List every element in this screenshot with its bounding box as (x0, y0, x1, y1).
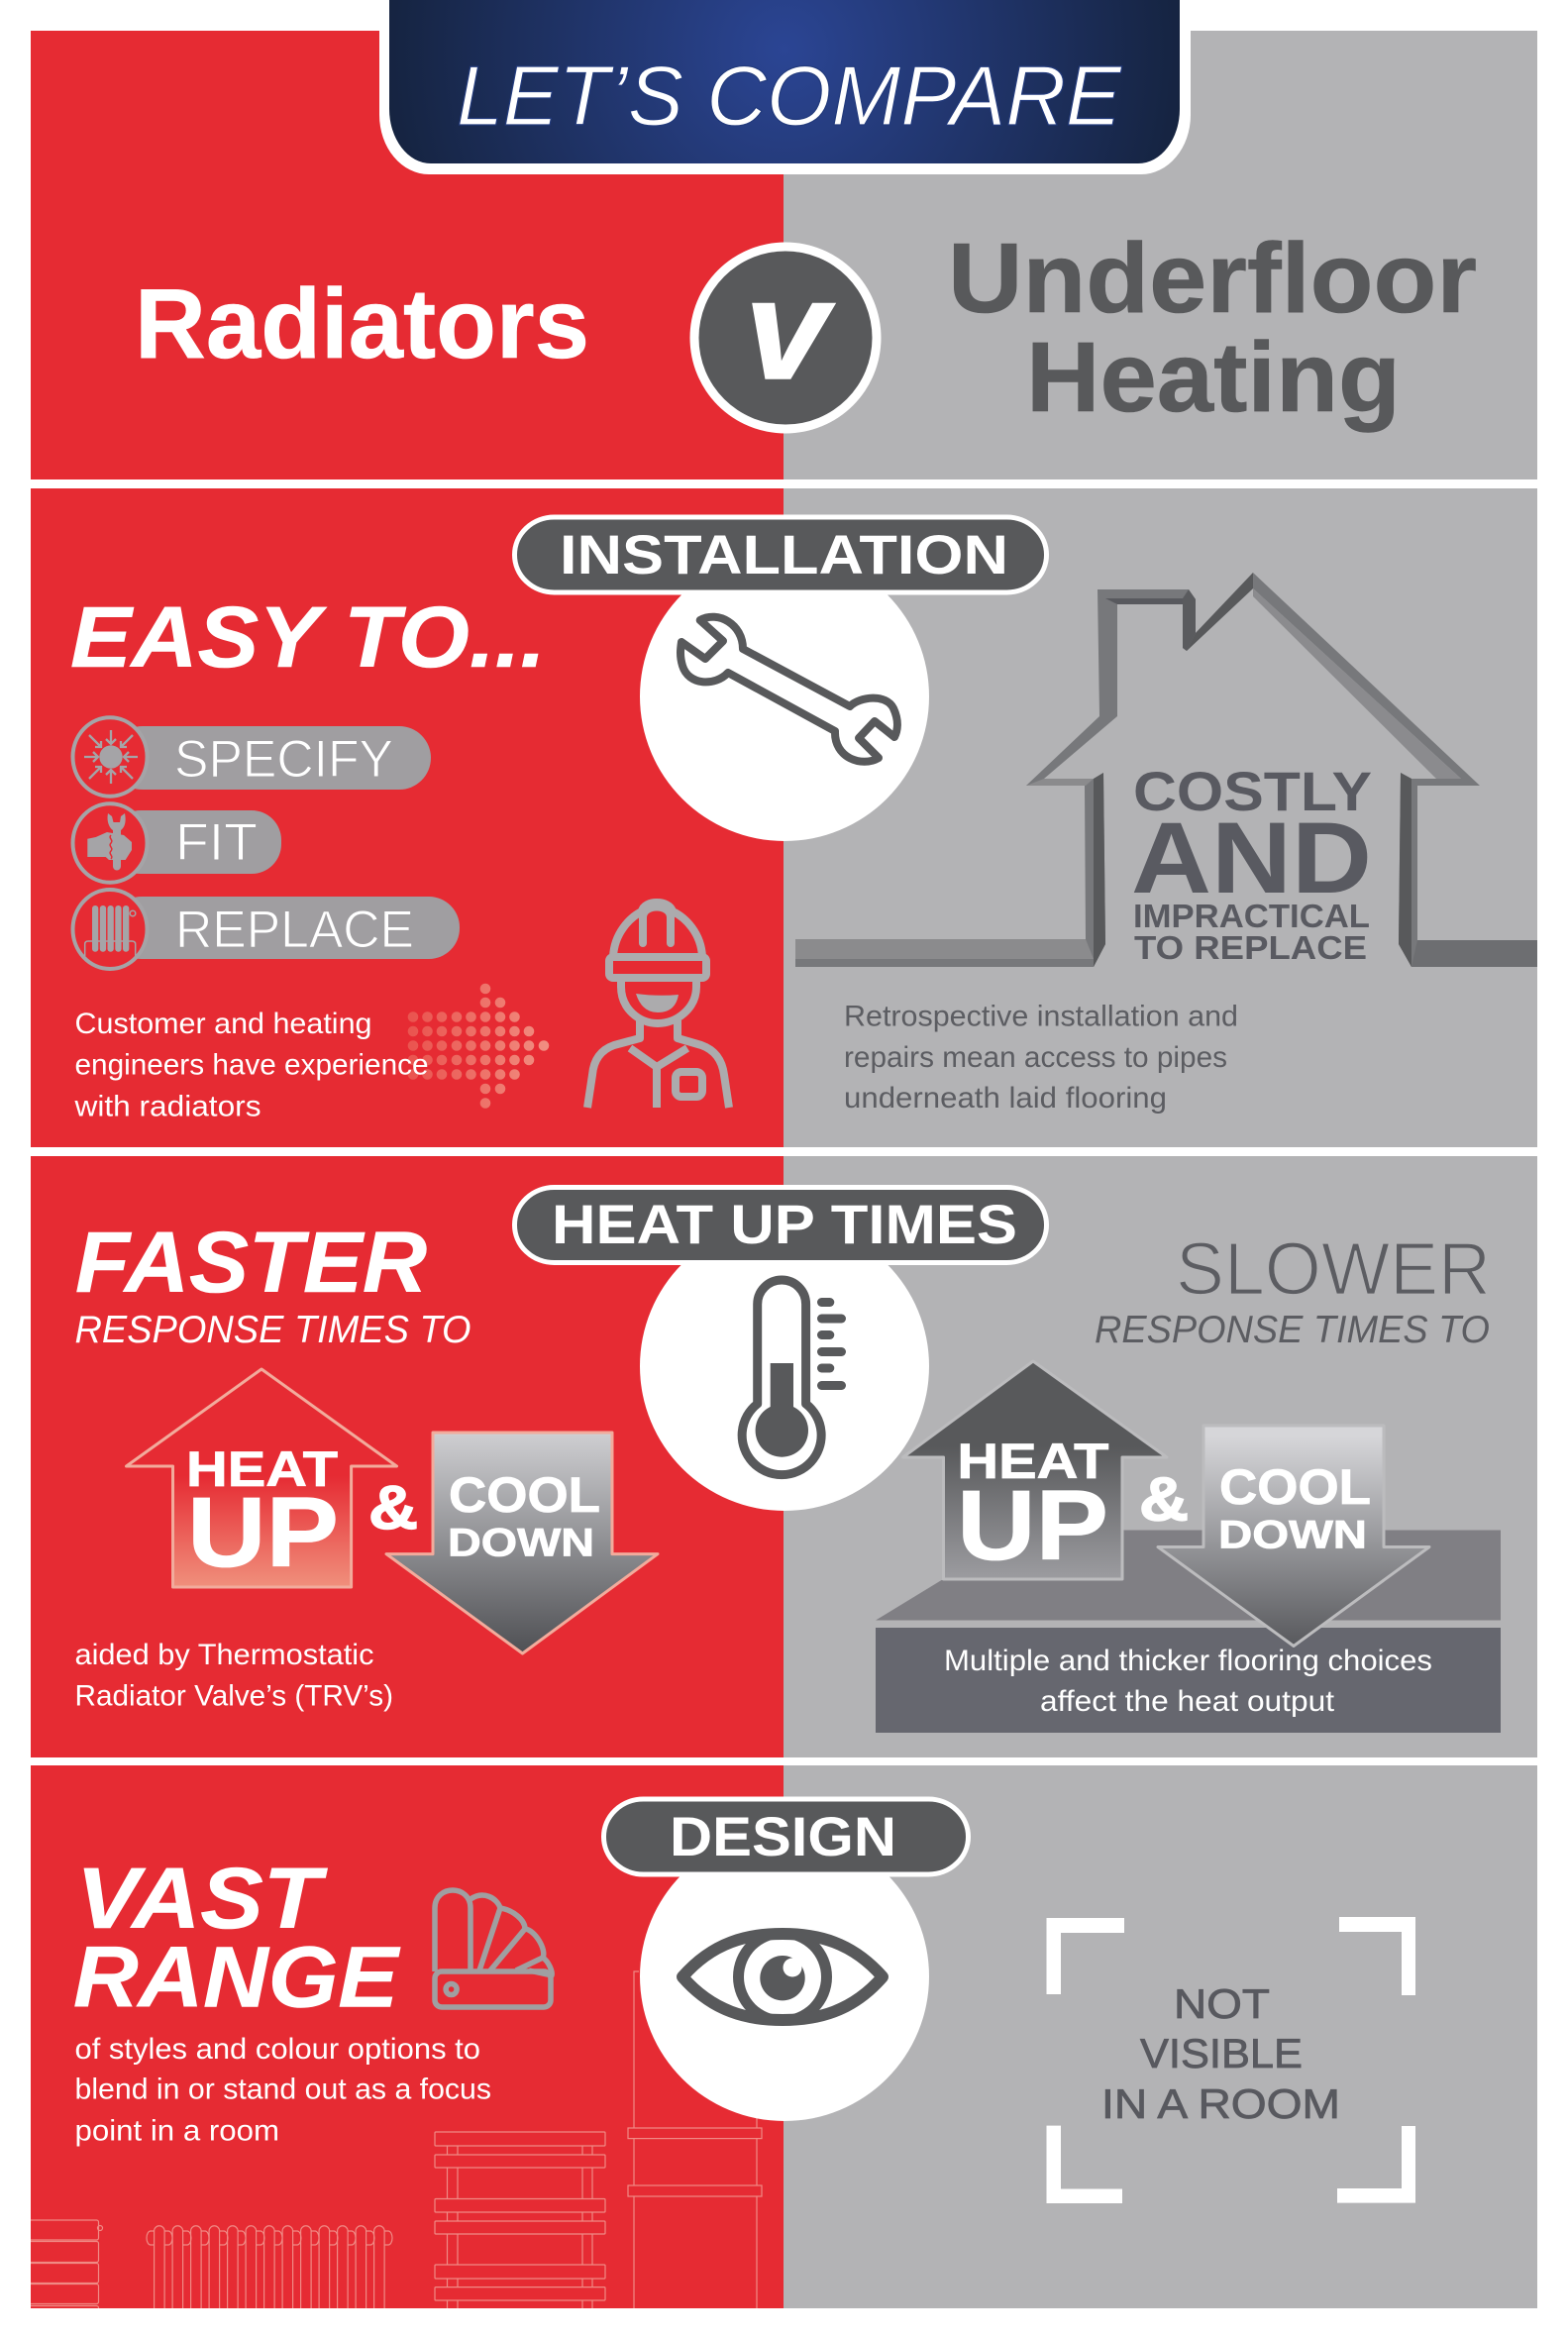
arrow: heat up on red: HEAT (186, 1441, 338, 1497)
panel: installation (31, 488, 1537, 1147)
flooring text block: affect the heat output (1040, 1685, 1335, 1718)
icon: colour swatch fan (435, 1890, 552, 2007)
ampersand: & (368, 1474, 418, 1542)
versus badge: v (745, 252, 836, 409)
text: retrospective installation (844, 1001, 1238, 1115)
arrow: cool down on grey (1158, 1426, 1429, 1647)
ampersand grey: & (1139, 1466, 1189, 1534)
heading: underfloor heating (948, 223, 1477, 433)
radiator outline: column (147, 2226, 392, 2308)
panel: header comparison (31, 0, 1537, 479)
icon: heating engineer (587, 903, 729, 1108)
heading: vast range: VAST (76, 1851, 329, 1947)
line art: radiator range (20, 1971, 762, 2316)
arrow: heat up on grey: UP (957, 1470, 1108, 1581)
icon: house outline (795, 573, 1537, 967)
text: not visible in a room: IN A ROOM (1101, 2080, 1340, 2127)
icon: hand holding wrench (87, 813, 132, 870)
item: specify: SPECIFY (174, 730, 393, 789)
text: styles and colour options: of styles and colour options to (75, 2033, 480, 2066)
text: aided by thermostatic valves (75, 1639, 393, 1712)
heading: slower response times to (1095, 1226, 1491, 1351)
heading: vast range: RANGE (73, 1930, 401, 2026)
heading: underfloor heating: Underfloor (948, 223, 1477, 334)
text: aided by thermostatic valves: aided by Thermostatic (75, 1639, 374, 1671)
arrow: cool down on red: COOL (449, 1467, 600, 1523)
panel: heat up times (31, 1156, 1537, 1757)
icon circle: wrench (640, 552, 929, 841)
arrow: heat up on red: UP (187, 1477, 339, 1588)
text: not visible in a room: VISIBLE (1140, 2030, 1303, 2076)
text: costly and impractical to replace (1131, 760, 1372, 966)
arrow: heat up on grey: HEAT (957, 1434, 1108, 1489)
text: costly and impractical to replace: AND (1131, 801, 1372, 914)
text: costly and impractical to replace: IMPRACTICAL (1133, 898, 1370, 934)
section pill: installation: INSTALLATION (560, 523, 1008, 585)
text: styles and colour options: blend in or stand out as a focus (75, 2073, 491, 2106)
radiator outline: tall vertical (628, 1971, 762, 2308)
dotted arrow (408, 984, 549, 1109)
title banner: let's compare (379, 0, 1191, 174)
section pill: design (604, 1799, 969, 1874)
radiator outline: horizontal stack (31, 2219, 103, 2308)
section pill: installation (515, 517, 1046, 592)
heading: faster response times to (75, 1215, 471, 1351)
heading: easy to: EASY TO... (70, 589, 546, 686)
arrow: cool down on red: DOWN (448, 1522, 594, 1565)
arrow: cool down on grey: COOL (1219, 1459, 1371, 1515)
text: styles and colour options: point in a room (75, 2114, 279, 2148)
heading: underfloor heating: Heating (1026, 322, 1401, 433)
arrow: heat up on grey (903, 1361, 1167, 1581)
item: replace: REPLACE (175, 901, 414, 959)
text: customer and heating engineers: engineers have experience (75, 1048, 428, 1082)
heading: slower response times to: RESPONSE TIMES TO (1095, 1309, 1490, 1351)
arrow: cool down on red (386, 1433, 658, 1653)
icon: sun with inward arrows (84, 730, 138, 784)
text: customer and heating engineers: with radiators (73, 1090, 261, 1123)
heading: slower response times to: SLOWER (1176, 1226, 1491, 1310)
section pill: heat up times: HEAT UP TIMES (552, 1193, 1017, 1255)
panel: design (20, 1765, 1537, 2316)
heading: faster response times to: RESPONSE TIMES TO (75, 1309, 471, 1351)
floor slab (876, 1530, 1501, 1621)
text: not visible in a room: NOT (1174, 1980, 1270, 2027)
arrow: heat up on red (127, 1369, 396, 1588)
flooring text block: Multiple and thicker flooring choices (944, 1645, 1432, 1677)
versus badge (689, 242, 882, 434)
item: replace (73, 890, 460, 969)
item: fit: FIT (175, 813, 258, 872)
arrow: cool down on grey: DOWN (1218, 1514, 1367, 1557)
icon circle: thermometer (640, 1222, 929, 1511)
flooring text block (876, 1628, 1501, 1733)
text: costly and impractical to replace: TO REPLACE (1134, 929, 1367, 966)
text: customer and heating engineers (73, 1008, 428, 1123)
heading: faster response times to: FASTER (75, 1215, 427, 1311)
text: costly and impractical to replace: COSTLY (1133, 760, 1372, 822)
section pill: design: DESIGN (670, 1805, 896, 1867)
text: not visible in a room (1101, 1980, 1340, 2127)
section pill: heat up times (515, 1187, 1046, 1262)
text: styles and colour options (75, 2033, 491, 2148)
heading: radiators: Radiators (135, 268, 589, 379)
text: retrospective installation: Retrospective installation and (844, 1001, 1238, 1032)
frame: corner brackets (1046, 1917, 1415, 2203)
item: fit (73, 803, 281, 883)
item: specify (73, 717, 431, 797)
text: retrospective installation: repairs mean access to pipes (844, 1041, 1227, 1074)
title banner: let's compare: LET’S COMPARE (457, 50, 1122, 144)
text: aided by thermostatic valves: Radiator Valve’s (TRV’s) (75, 1680, 393, 1712)
icon: radiator (85, 905, 136, 956)
icon circle: eye (640, 1876, 929, 2121)
heading: vast range (73, 1851, 401, 2026)
text: retrospective installation: underneath laid flooring (844, 1082, 1167, 1115)
radiator outline: towel rail (435, 2132, 605, 2308)
text: customer and heating engineers: Customer and heating (75, 1008, 372, 1040)
